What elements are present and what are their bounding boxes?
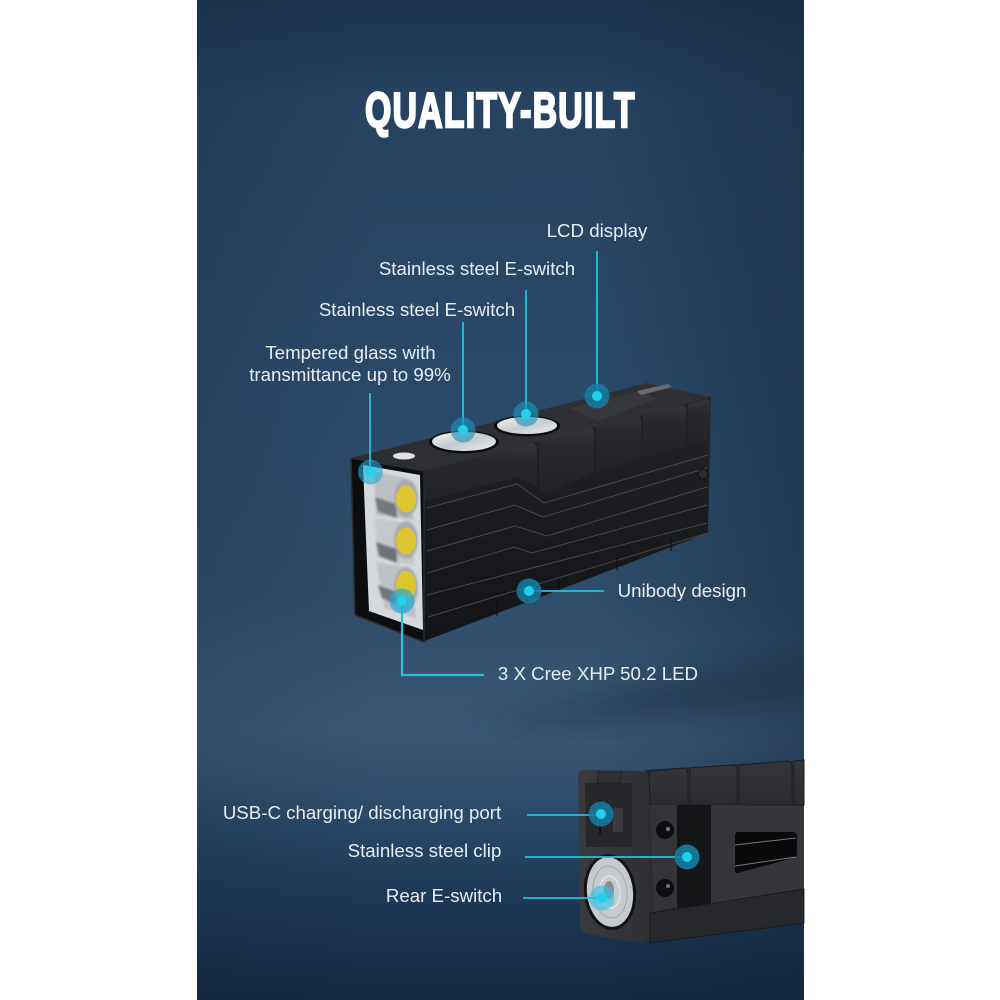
label: LED: 3 X Cree XHP 50.2 LED: [498, 663, 698, 684]
body side face: [422, 397, 711, 642]
upper segments: [649, 760, 804, 805]
callout dots: [358, 384, 700, 910]
label: LCD display: LCD display: [547, 220, 648, 241]
main flashlight: [351, 383, 711, 642]
infographic canvas: [197, 0, 804, 1000]
labels: [223, 220, 746, 906]
label: unibody design: Unibody design: [618, 580, 746, 601]
rear side face: [645, 760, 804, 943]
front bezel: [351, 458, 424, 642]
callout lines: [370, 251, 687, 898]
screw: [698, 469, 708, 479]
rear flashlight: [578, 760, 804, 943]
glass lens: [363, 465, 423, 630]
switch 2: [494, 416, 560, 436]
label: tempered glass: Tempered glass with: [265, 342, 436, 363]
background panel: [197, 0, 830, 1000]
clip: [650, 805, 804, 911]
side ribs: [427, 455, 708, 617]
title: QUALITY-BUILT: [365, 83, 636, 138]
switch 1: [429, 430, 499, 454]
rear end face: [578, 770, 649, 943]
LCD display: [569, 391, 657, 421]
label: transmittance: transmittance up to 99%: [249, 364, 451, 385]
raised side panels: [423, 399, 711, 501]
label: stainless steel e-switch upper: Stainless steel E-switch: [379, 258, 575, 279]
bottom segments: [650, 889, 804, 943]
logo on top: [393, 452, 415, 460]
body top face: [351, 383, 711, 471]
label: USB-C port: USB-C charging/ discharging port: [223, 802, 502, 823]
clip screws: [656, 821, 674, 897]
reflectors: [374, 472, 418, 618]
brand mark on top: [637, 384, 672, 395]
label: rear E-switch: Rear E-switch: [386, 885, 502, 906]
label: stainless steel e-switch lower: Stainless steel E-switch: [319, 299, 515, 320]
segment ticks: [497, 537, 671, 616]
USB-C port cover: [585, 783, 632, 847]
clip slot: [735, 832, 797, 873]
LEDs: [396, 486, 416, 599]
rear E-switch: [580, 851, 640, 933]
label: steel clip: Stainless steel clip: [348, 840, 501, 861]
